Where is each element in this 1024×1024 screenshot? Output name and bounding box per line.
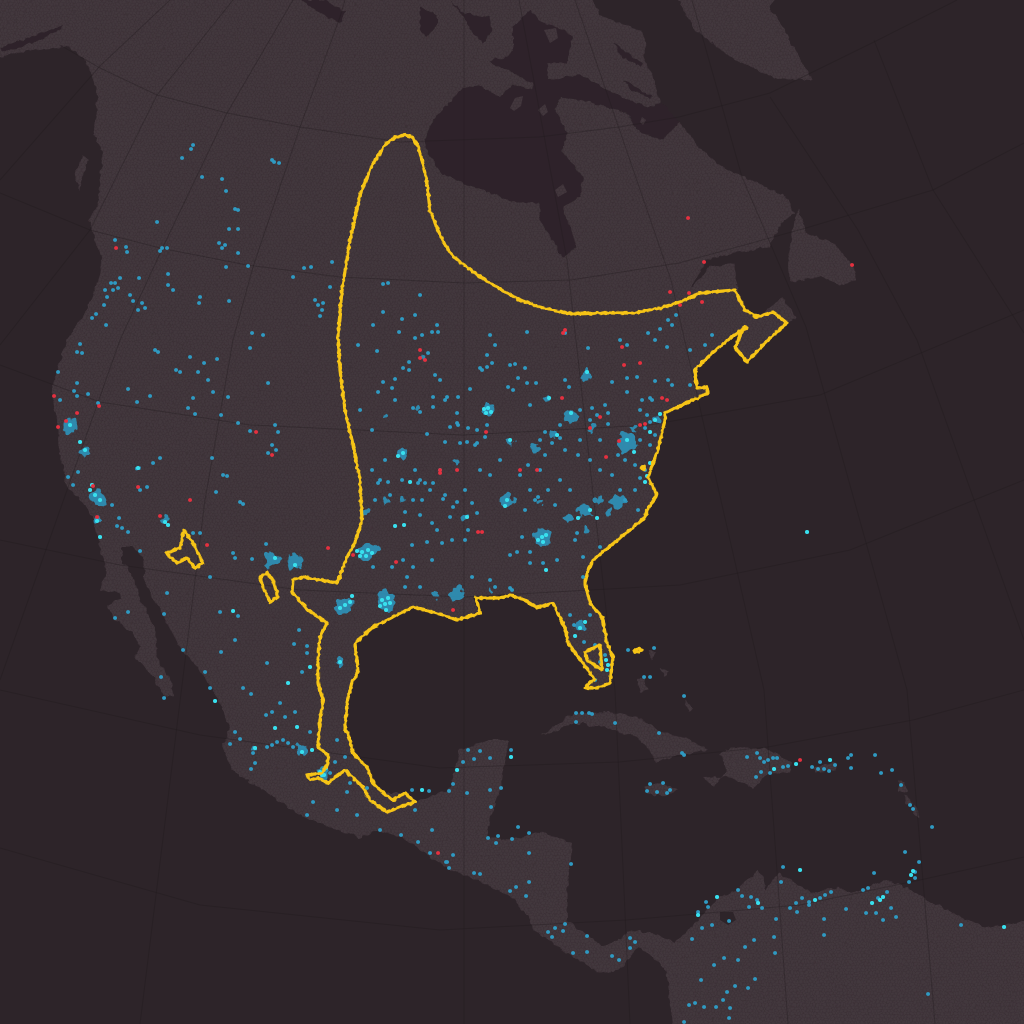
isolated range patch: Arizona and New Mexico [166,530,203,568]
Lake Maracaibo [720,912,736,925]
islands inside Hudson Bay [510,28,646,197]
Lesser Antilles [898,780,919,818]
Bahamas [637,650,692,712]
occurrence dots: bright cyan [70,372,1004,927]
inland seas: Hudson Bay, Hudson Strait and Arctic channels [0,0,680,258]
Cuba [542,712,708,763]
isolated range patch: northern Mexico [260,573,278,602]
Puerto Rico [812,762,836,772]
Everglades inner loop [585,645,602,670]
occurrence dots: blue [58,145,961,1022]
Vancouver Island [75,155,88,190]
isolated range patch: Gulf of Maine spur [740,328,745,333]
Greenland [675,0,812,80]
species range outline [166,135,787,812]
Hispaniola [704,748,792,788]
occurrence dots: red [54,218,852,853]
Jamaica [645,783,678,797]
isolated range patch: Bahamas [634,648,642,652]
dense occurrence clusters [63,355,661,779]
Newfoundland [788,208,856,285]
main range boundary [292,135,787,812]
isolated range patch: Chesapeake dot [640,465,646,471]
